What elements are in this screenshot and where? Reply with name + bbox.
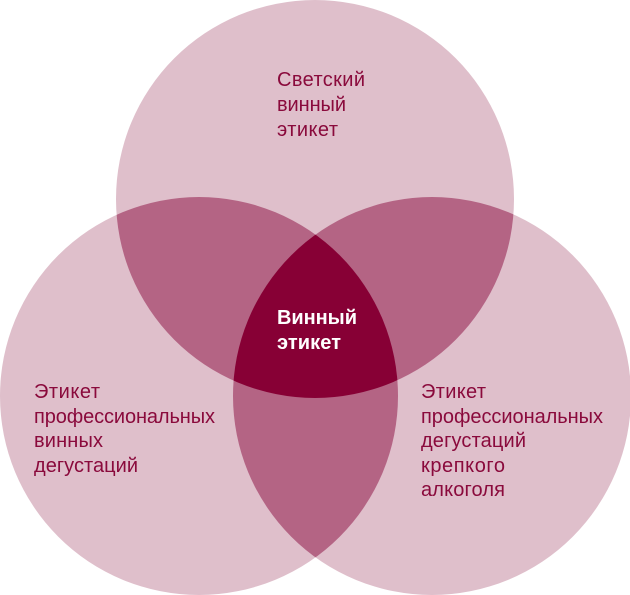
- label: top circle: [277, 69, 365, 141]
- label: centre: Винный: [277, 307, 357, 329]
- circle: left: [0, 197, 398, 595]
- label: right circle: профессиональных: [421, 406, 603, 428]
- label: top circle: винный: [277, 94, 346, 116]
- label: right circle: [421, 381, 603, 501]
- label: centre: этикет: [277, 332, 341, 354]
- overlap: top and right: [316, 197, 514, 380]
- label: centre: [277, 307, 357, 354]
- label: right circle: крепкого: [421, 455, 505, 477]
- label: right circle: алкоголя: [421, 479, 505, 501]
- label: left circle: дегустаций: [34, 455, 138, 477]
- label: right circle: дегустаций: [421, 430, 526, 452]
- circle: top: [116, 0, 514, 398]
- label: top circle: Светский: [277, 69, 365, 91]
- overlap: left and right: [233, 380, 398, 558]
- label: left circle: [34, 381, 215, 477]
- overlap: centre: [234, 234, 398, 398]
- label: right circle: Этикет: [421, 381, 486, 403]
- label: left circle: Этикет: [34, 381, 100, 403]
- label: left circle: винных: [34, 430, 103, 452]
- overlap: top and left: [116, 197, 316, 380]
- label: top circle: этикет: [277, 119, 338, 141]
- label: left circle: профессиональных: [34, 406, 215, 428]
- circle: right: [233, 197, 630, 595]
